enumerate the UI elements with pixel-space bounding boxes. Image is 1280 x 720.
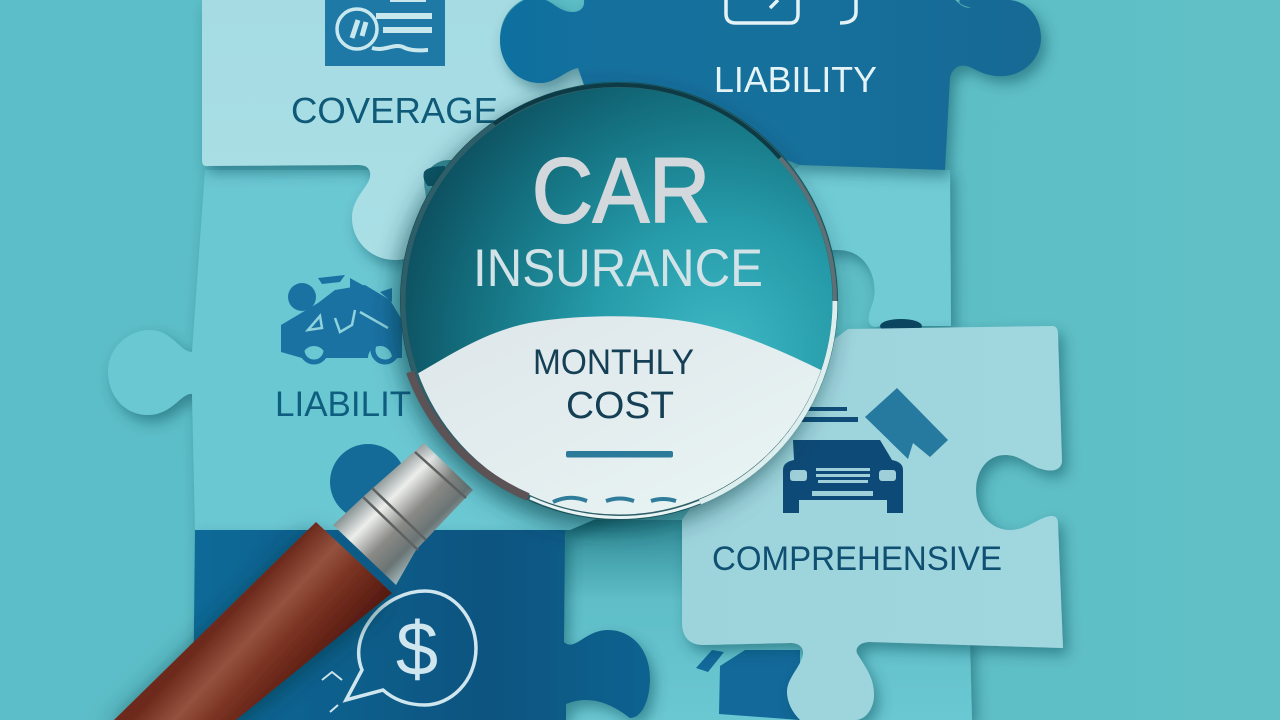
label: liability: LIABILIT — [275, 385, 411, 424]
lens: white panel — [418, 316, 821, 514]
lens: divider — [566, 451, 673, 458]
lens: title car: CAR — [532, 140, 710, 242]
puzzle piece: left middle with liability label — [108, 170, 640, 530]
puzzle piece: liability top — [500, 0, 1041, 170]
icon: car with house roof — [783, 388, 948, 513]
puzzle piece: right middle — [700, 165, 951, 327]
icon: coverage document — [325, 0, 445, 66]
notch: dark gap beside knob — [424, 166, 445, 186]
label: liability: LIABILITY — [714, 59, 877, 100]
handle: metal ferrule — [333, 443, 473, 585]
notch showing dark piece — [330, 444, 406, 520]
lens content — [400, 82, 840, 530]
label: comprehensive: COMPREHENSIVE — [712, 540, 1002, 578]
lens: title insurance: INSURANCE — [473, 239, 763, 298]
handle: wood — [114, 522, 392, 720]
puzzle piece: bottom left dark with dollar icon — [193, 530, 650, 720]
puzzle piece: comprehensive — [682, 326, 1063, 720]
lens rim — [403, 85, 835, 517]
icon: liability outline — [726, 0, 856, 23]
label: coverage: COVERAGE — [291, 90, 498, 131]
lens body — [400, 82, 838, 520]
icon: dollar speech bubble: $ — [396, 607, 438, 692]
icon: dollar speech bubble — [322, 591, 476, 712]
infographic scene — [102, 0, 1075, 720]
magnifying glass — [114, 82, 840, 720]
small dark gap marks — [880, 319, 922, 333]
puzzle piece: bottom middle — [560, 520, 972, 720]
lens: monthly: MONTHLY — [533, 343, 694, 382]
lens: cost: COST — [566, 385, 674, 427]
icon: damaged car — [281, 275, 402, 362]
icon: partial house — [696, 650, 800, 720]
lens: cut-off marks — [553, 498, 676, 502]
puzzle piece: coverage — [202, 0, 600, 260]
